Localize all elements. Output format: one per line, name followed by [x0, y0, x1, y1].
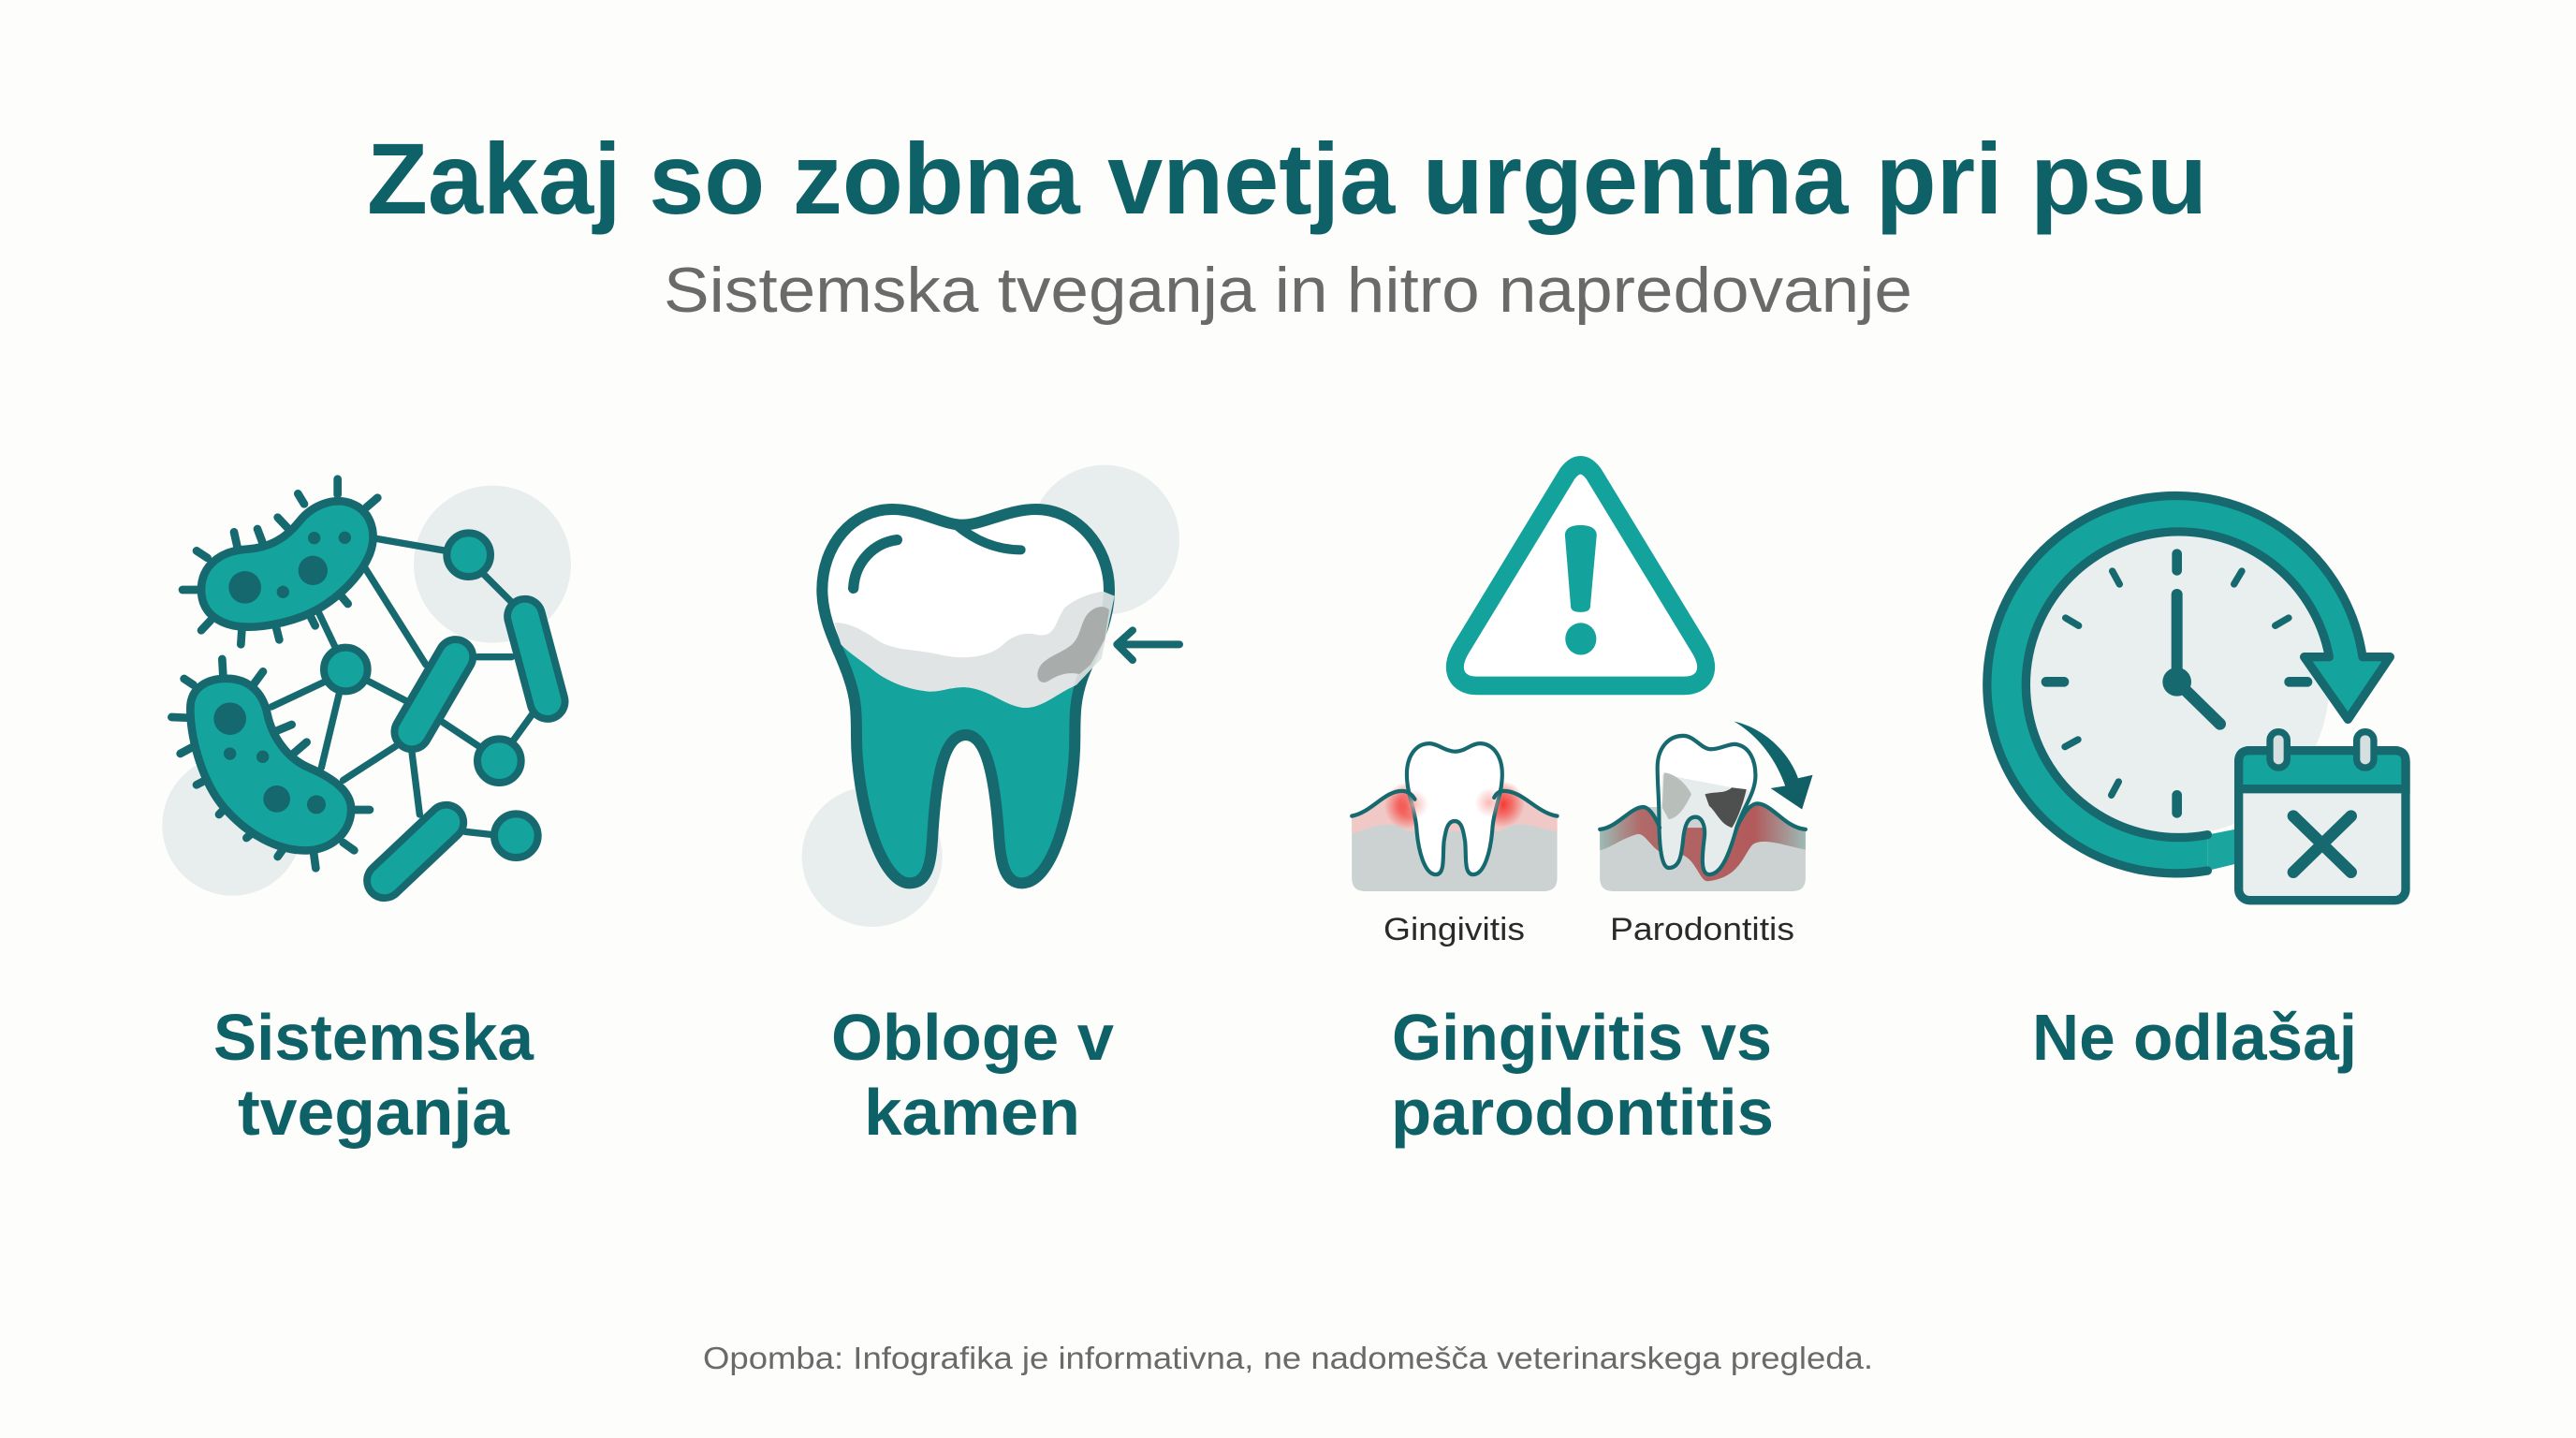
subtitle: Sistemska tveganja in hitro napredovanje: [664, 255, 1912, 326]
heading: Obloge v kamen: kamen: [864, 1076, 1080, 1149]
heading: Obloge v kamen: Obloge v: [831, 1001, 1114, 1074]
heading: Ne odlašaj: Ne odlašaj: [2032, 1001, 2357, 1074]
icon: clock with arrow and calendar: [1987, 496, 2406, 901]
heading: Obloge v kamen: [831, 1001, 1114, 1149]
footnote: Opomba: Infografika je informativna, ne nadomešča veterinarskega pregleda.: [703, 1341, 1873, 1375]
icon: periodontitis tooth and gum: [1600, 722, 1813, 891]
heading: Gingivitis vs parodontitis: Gingivitis vs: [1392, 1001, 1772, 1074]
heading: Gingivitis vs parodontitis: parodontitis: [1391, 1076, 1774, 1149]
title: Zakaj so zobna vnetja urgentna pri psu: [367, 122, 2207, 235]
heading: Gingivitis vs parodontitis: [1391, 1001, 1774, 1149]
label: Gingivitis: Gingivitis: [1383, 912, 1525, 947]
heading: Sistemska tveganja: [213, 1001, 534, 1149]
icon: warning triangle: [1455, 465, 1706, 685]
icon: gingivitis tooth and gum: [1352, 743, 1558, 891]
icon: tooth with plaque and tartar: [802, 465, 1179, 927]
heading: Sistemska tveganja: Sistemska: [213, 1001, 534, 1074]
label: Parodontitis: Parodontitis: [1610, 912, 1794, 947]
heading: Sistemska tveganja: tveganja: [238, 1076, 510, 1149]
icon: bacteria network: [162, 479, 571, 896]
